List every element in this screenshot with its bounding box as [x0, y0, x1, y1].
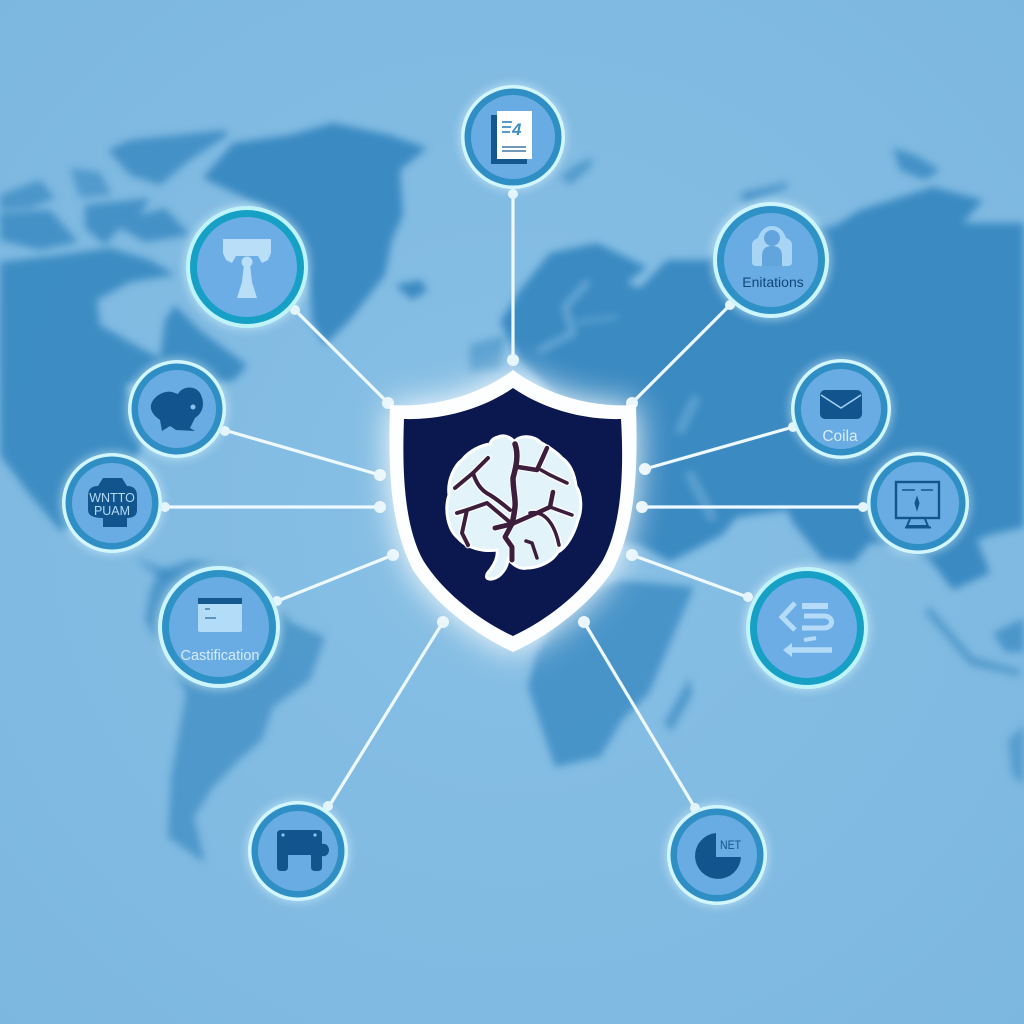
icon: arrows — [782, 603, 832, 657]
icon: envelope — [820, 390, 862, 419]
node: mail — [789, 357, 893, 461]
icon: monitor — [896, 482, 939, 528]
icon: badge — [88, 478, 137, 527]
world map — [0, 123, 1024, 863]
label: Coila: Coila — [822, 428, 858, 445]
icon: map blob — [151, 387, 203, 431]
node: document — [459, 83, 567, 191]
label: WNTTO PUAM: PUAM — [94, 504, 130, 518]
connectors — [160, 189, 868, 813]
icon: T tool — [223, 239, 271, 298]
node: castification — [156, 564, 282, 690]
label: Castification: Castification — [181, 648, 259, 664]
label: Enitations: Enitations — [742, 274, 804, 290]
icon: puzzle — [277, 830, 329, 871]
shield — [389, 370, 637, 652]
label: NET: NET — [720, 838, 742, 852]
icon: brain — [447, 436, 581, 579]
node: monitor — [865, 450, 971, 556]
node: NET — [665, 803, 769, 907]
icon: window — [198, 598, 242, 632]
node: blob — [126, 358, 228, 460]
icon: lock — [752, 226, 792, 266]
icon: document: 4 — [511, 120, 522, 139]
node: WNTTO — [60, 451, 164, 555]
node: arrows — [744, 565, 870, 691]
node: T tool — [184, 204, 310, 330]
node: puzzle — [246, 799, 350, 903]
node: entitlements — [711, 200, 831, 320]
icon: pie chart — [695, 833, 741, 879]
label: WNTTO PUAM: WNTTO — [89, 491, 135, 505]
